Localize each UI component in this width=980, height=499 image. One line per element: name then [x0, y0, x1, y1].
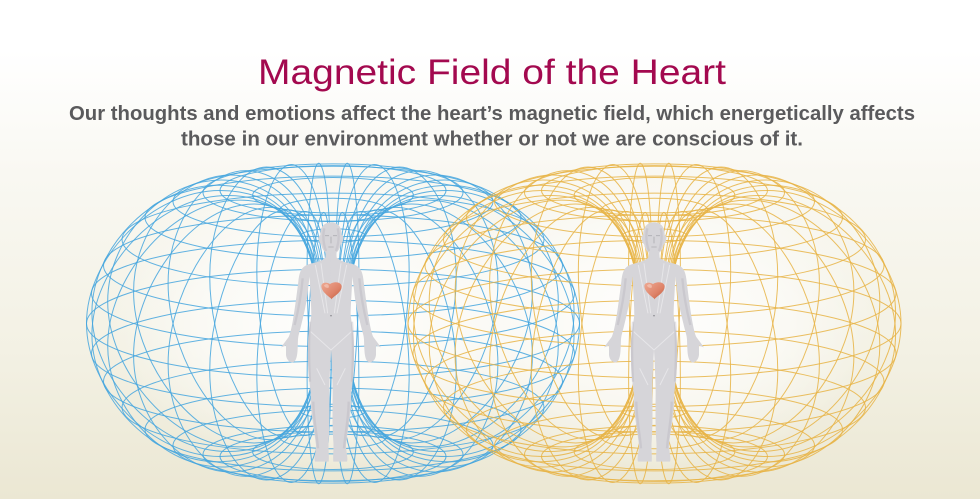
title: Magnetic Field of the Heart — [258, 53, 726, 92]
glow: left field — [108, 173, 558, 473]
subtitle text block: those in our environment whether or not we are conscious of it. — [181, 128, 803, 150]
human figure: right — [604, 222, 704, 462]
human figure: left — [281, 222, 381, 462]
subtitle text block: Our thoughts and emotions affect the heart’s magnetic field, which energetically affects — [69, 103, 915, 125]
blue magnetic field torus — [86, 137, 580, 499]
glow: right field — [429, 173, 879, 473]
subtitle text block — [69, 103, 915, 150]
orange magnetic field torus — [408, 137, 901, 499]
